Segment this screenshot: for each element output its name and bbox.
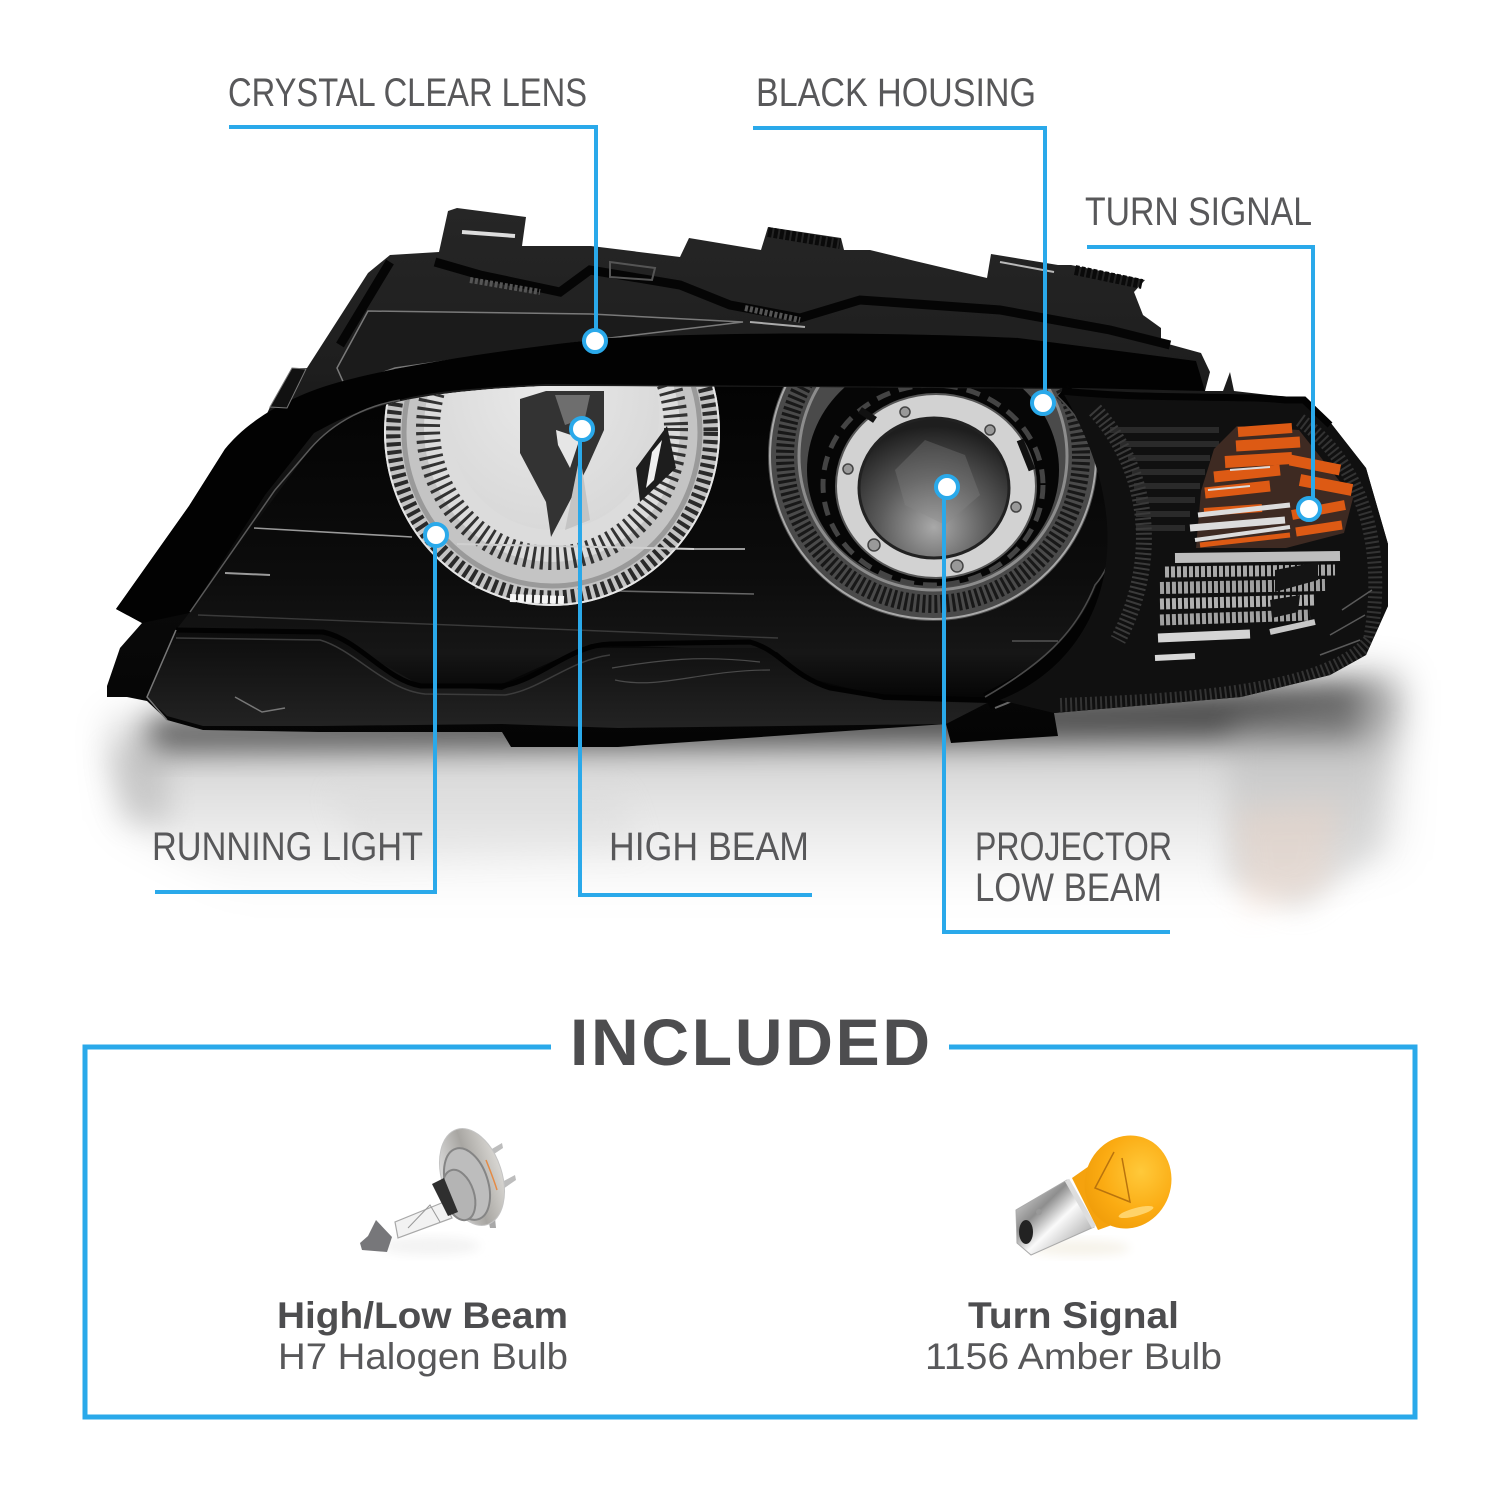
ring lower band highlights [457, 544, 694, 549]
dotted bezel texture [1095, 410, 1144, 640]
amber bulb caption [925, 1295, 1222, 1377]
H7 bulb caption: H7 Halogen Bulb [278, 1336, 568, 1377]
amber reflector [1196, 426, 1353, 548]
callout: turn signal: TURN SIGNAL [1085, 190, 1312, 234]
callout: crystal clear lens [228, 71, 606, 352]
upper housing details [340, 232, 1170, 345]
lens edge highlight [190, 400, 400, 612]
clear reflector stripes [1155, 556, 1340, 658]
amber bulb caption: Turn Signal [968, 1295, 1179, 1336]
lower clear lens panel [147, 630, 987, 728]
included box frame [85, 1047, 1415, 1417]
projector bezel and lens [836, 394, 1036, 578]
callout: high beam [571, 418, 812, 895]
callout: crystal clear lens: CRYSTAL CLEAR LENS [228, 71, 587, 115]
lens rim band [116, 334, 1205, 623]
H7 bulb caption [277, 1295, 568, 1377]
callout: projector low beam [936, 476, 1172, 932]
icon: 1156 amber bulb [1016, 1123, 1184, 1256]
amber bulb caption: 1156 Amber Bulb [925, 1336, 1222, 1377]
floor reflection and shadow [108, 680, 1400, 915]
turn signal top trim [1062, 391, 1330, 425]
upper lens window [337, 311, 743, 386]
included heading: INCLUDED [570, 1005, 930, 1079]
clip tab on rim [270, 368, 306, 408]
H7 bulb caption: High/Low Beam [277, 1295, 568, 1336]
turn signal section [1000, 385, 1400, 725]
callout: projector low beam: PROJECTOR [975, 825, 1172, 869]
right projector ring [768, 386, 1098, 621]
callout: black housing: BLACK HOUSING [756, 71, 1036, 115]
right reflector shape [636, 426, 676, 502]
callout: high beam: HIGH BEAM [609, 825, 809, 869]
callout: black housing [753, 71, 1054, 414]
lower lens contour lines [147, 630, 987, 720]
callout: turn signal [1085, 190, 1320, 520]
headlight illustration [107, 208, 1400, 747]
dark ribbed zone [1110, 430, 1219, 528]
callout: running light [152, 524, 447, 892]
outer bezel arc [985, 390, 1139, 708]
headlight silhouette [107, 208, 1388, 747]
left high beam ring [384, 386, 720, 606]
callout: running light: RUNNING LIGHT [152, 825, 423, 869]
lens horizontal lines [198, 528, 1058, 641]
black lens body [176, 386, 1129, 701]
callout: projector low beam: LOW BEAM [975, 866, 1162, 910]
infographic canvas [82, 78, 1422, 1420]
center reflector shape [520, 391, 604, 537]
icon: H7 halogen bulb [360, 1120, 516, 1255]
